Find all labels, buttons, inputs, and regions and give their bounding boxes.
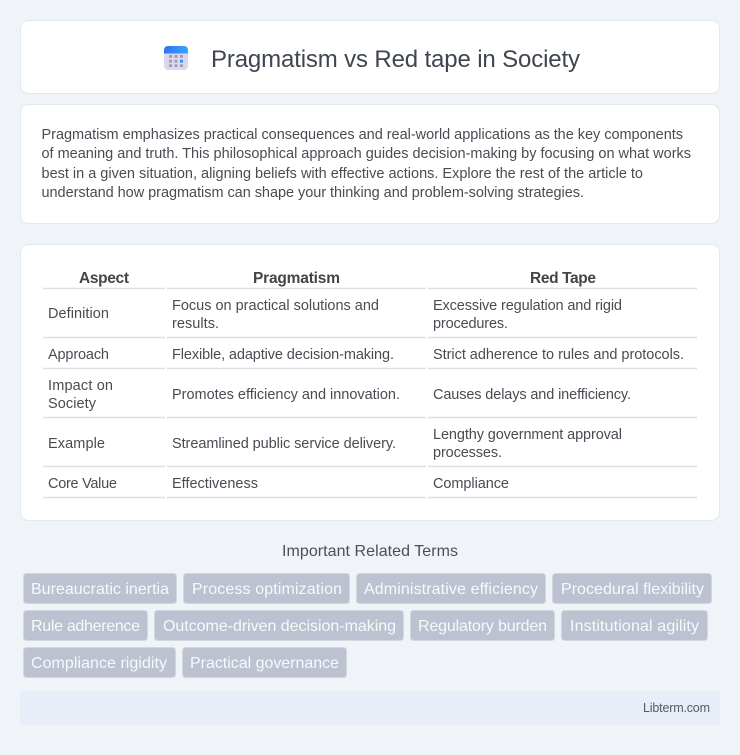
tag: procedural flexibility: [552, 574, 712, 604]
tag: process optimization: [184, 574, 350, 604]
table row: example: Lengthy government approval: [433, 427, 622, 443]
table row: approach: [48, 347, 684, 363]
icon: calendar: [164, 46, 188, 70]
tag: outcome-driven decision-making: [154, 610, 404, 640]
table row: impact on society: Impact on: [48, 378, 113, 394]
table header row: Pragmatism: [253, 270, 340, 287]
tag: practical governance: [182, 648, 346, 678]
table row: core value: Core Value: [48, 476, 117, 492]
tag: outcome-driven decision-making: Outcome-driven decision-making: [163, 618, 396, 635]
tag: regulatory burden: [410, 610, 554, 640]
table row: core value: Compliance: [433, 476, 509, 492]
table row: definition: results.: [172, 316, 219, 332]
tag: rule adherence: [24, 610, 148, 640]
table row: approach: Approach: [48, 347, 109, 363]
heading: important related terms: Important Related Terms: [282, 543, 458, 560]
table row: core value: [48, 476, 509, 492]
table row: impact on society: Promotes efficiency and innovation.: [172, 387, 400, 403]
title: Pragmatism vs Red tape in Society: [211, 46, 580, 73]
panel: header: [20, 20, 720, 94]
tag: practical governance: Practical governance: [190, 655, 339, 672]
tag: regulatory burden: Regulatory burden: [418, 618, 547, 635]
tag: institutional agility: Institutional agility: [570, 618, 699, 635]
table row: definition: Excessive regulation and rigid: [433, 298, 622, 314]
table row: impact on society: Society: [48, 396, 97, 412]
panel: comparison table: [20, 244, 720, 520]
table row: example: [48, 427, 622, 461]
tag: procedural flexibility: Procedural flexibility: [561, 581, 704, 598]
table row: definition: procedures.: [433, 316, 508, 332]
panel: introduction: [20, 104, 720, 224]
text block: introduction: [42, 127, 691, 201]
table header row: [79, 270, 596, 287]
text block: introduction: Pragmatism emphasizes practical consequences and real-world applications as the key components: [42, 127, 683, 143]
table row: impact on society: [48, 378, 631, 412]
table row: example: Example: [48, 436, 105, 452]
table header row: Aspect: [79, 270, 129, 287]
table row: example: processes.: [433, 445, 502, 461]
table row: definition: [48, 298, 622, 332]
tag: compliance rigidity: [24, 648, 176, 678]
tag: bureaucratic inertia: [24, 574, 176, 604]
table row: definition: Definition: [48, 306, 109, 322]
tag: institutional agility: [562, 610, 708, 640]
footer credit: Libterm.com: [643, 701, 710, 715]
footer bar: [20, 691, 720, 725]
text block: introduction: of meaning and truth. This philosophical approach guides decision-making by focusing on what works: [42, 146, 691, 162]
tag: compliance rigidity: Compliance rigidity: [31, 655, 167, 672]
table row: approach: Strict adherence to rules and protocols.: [433, 347, 684, 363]
tag: bureaucratic inertia: Bureaucratic inertia: [31, 581, 169, 598]
table row: example: Streamlined public service delivery.: [172, 436, 396, 452]
table header row: Red Tape: [530, 270, 596, 287]
table row: approach: Flexible, adaptive decision-making.: [172, 347, 394, 363]
table row: impact on society: Causes delays and inefficiency.: [433, 387, 631, 403]
table row: definition: Focus on practical solutions and: [172, 298, 379, 314]
tag: rule adherence: Rule adherence: [31, 618, 140, 635]
tag: administrative efficiency: [356, 574, 546, 604]
text block: introduction: understand how pragmatism can shape your thinking and problem-solving strategies.: [42, 185, 584, 201]
tag: administrative efficiency: Administrative efficiency: [364, 581, 538, 598]
tag: process optimization: Process optimization: [192, 581, 342, 598]
text block: introduction: best in a given situation, aligning beliefs with effective actions. Explore the rest of the article to: [42, 166, 643, 182]
table row: core value: Effectiveness: [172, 476, 258, 492]
panel: related terms tags: [24, 574, 712, 678]
